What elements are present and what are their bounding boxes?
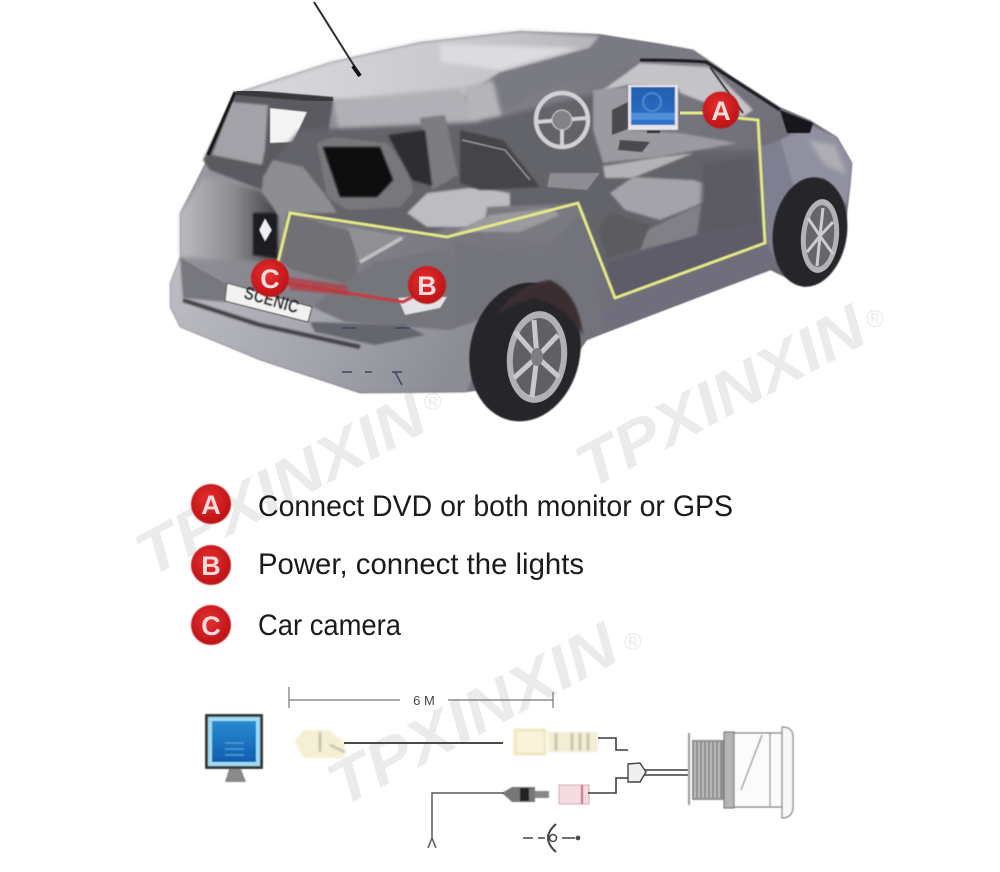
seat headrest outer [317,137,413,210]
specks [342,328,410,385]
rear window bright [270,108,307,143]
camera [688,727,793,818]
hatch lower panel [180,257,227,302]
sunroof highlight [440,44,580,70]
interior mid [270,92,765,298]
door panel [700,157,760,234]
window outer line [208,92,235,155]
legend row A: Connect DVD or both monitor or GPS [258,490,733,523]
seat headrest black [323,147,393,197]
console [547,173,600,190]
marker B: B [417,271,437,301]
front pillar body [760,140,800,262]
connector left [294,730,345,758]
fender front highlight [808,140,847,175]
roof edge line [640,60,780,110]
seat strut [420,115,458,190]
taillight highlight [398,296,447,315]
steering wheel [536,93,588,147]
trim panel [310,322,425,345]
legend row C: Car camera [258,609,401,642]
connector right yellow [515,730,598,754]
cable diagram [205,687,793,852]
seat left [262,160,337,215]
windshield [600,63,753,117]
illustration: car cutaway [170,2,854,432]
licence plate: SCENIC [242,283,301,317]
legend row A [191,484,733,524]
rear headrest light [463,80,502,122]
marker A [702,92,740,128]
door sill [600,246,777,330]
front seat dark [460,130,540,190]
roof panel [240,31,600,110]
window top bar [236,92,333,100]
dashboard [593,87,737,163]
watermarks: TPXINXIN [564,292,879,502]
wire junction [628,763,646,782]
antenna [314,2,358,72]
legend row C: C [201,611,221,641]
icon: monitor [205,714,263,782]
antenna base [353,66,360,76]
mid floor light [455,208,560,232]
seat below [640,203,703,250]
legend row C [191,605,401,645]
power wire [428,793,504,848]
seat side [598,212,650,258]
red cable [285,283,420,302]
roof right dark [460,36,727,125]
centre tunnel [603,153,694,178]
watermarks [124,292,884,820]
rear window glass [212,102,268,165]
watermarks: ® [624,629,642,656]
watermarks: TPXINXIN [124,380,439,590]
hatch dark strip [253,213,277,258]
seat panel [347,227,407,262]
monitor [628,85,678,133]
monitor cable [680,112,705,114]
rear wheel [457,272,593,432]
legend row B: Power, connect the lights [258,548,584,581]
marker A: A [711,96,731,126]
centre seat back [281,213,358,284]
front seat lines [462,140,530,180]
rear wheel arch [497,280,583,335]
bumper [170,257,493,393]
door lower [607,226,765,298]
watermarks: TPXINXIN [316,610,631,820]
legend [191,484,733,645]
car body [170,31,852,393]
wires to camera [588,738,688,793]
fender rear [455,213,603,340]
legend row B [191,545,584,585]
interior top [333,88,482,138]
trunk floor [315,250,493,330]
front seat base [610,177,717,220]
legend row B: B [201,551,221,581]
red glow [288,277,350,295]
marker C [251,259,289,297]
marker C: C [260,264,280,294]
a pillar line [710,67,743,113]
mid floor [483,203,587,243]
rear window dark frame [203,92,333,190]
bumper dark trim [183,300,360,347]
watermarks: ® [424,389,442,416]
cushion [407,187,510,227]
connector power [502,785,589,804]
yellow cable [278,118,765,298]
hatch [180,177,279,262]
seat panel light strip [360,238,402,262]
mirror [780,110,813,133]
dimension line: 6 M [289,687,553,708]
centre seat dark [388,130,432,186]
dimension line: 6 M: 6 M [413,693,435,708]
front wheel [766,172,854,292]
legend row A: A [201,490,221,520]
video cable [344,742,503,744]
watermarks: ® [866,306,884,333]
marker B [408,266,446,304]
logo [259,218,272,242]
fender front [780,125,852,205]
dash vents [612,102,650,152]
power symbol [523,824,580,852]
